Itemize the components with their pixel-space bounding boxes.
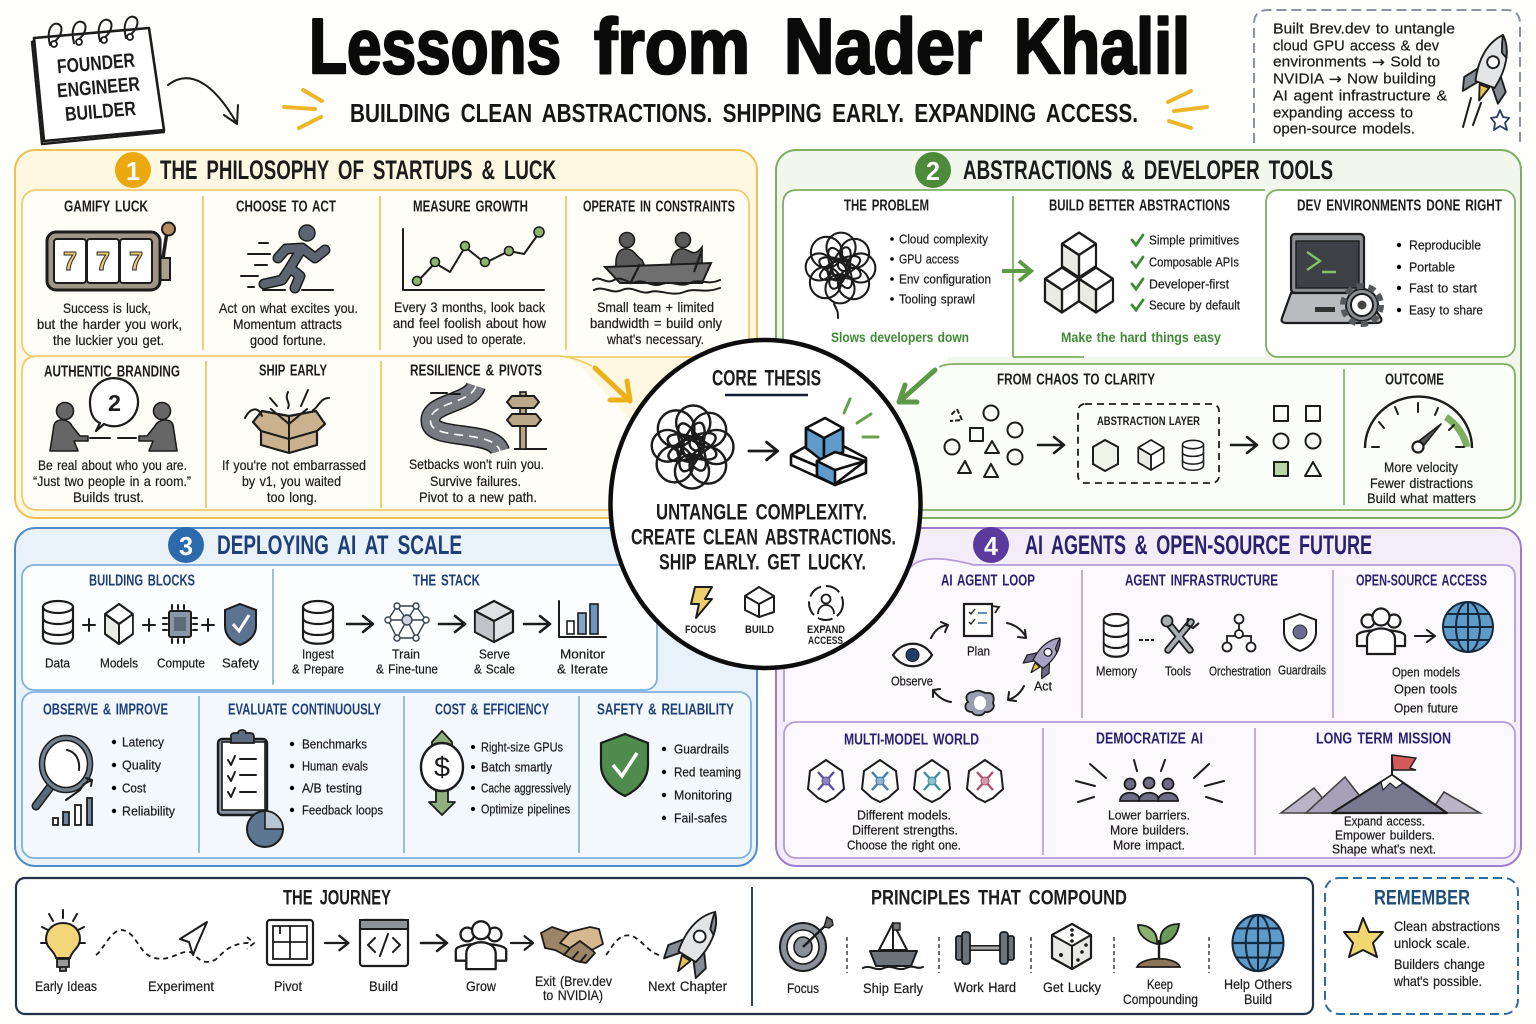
choose to act: Act on what excites you. — [219, 300, 358, 316]
the problem: THE PROBLEM — [844, 198, 929, 214]
evaluate continuously: EVALUATE CONTINUOUSLY — [228, 702, 381, 718]
bio callout: environments → Sold to — [1273, 53, 1440, 71]
the stack: & Iterate — [557, 662, 608, 676]
badge 4: 4 — [984, 531, 999, 561]
the stack: & Fine-tune — [376, 662, 438, 676]
yellow accent right — [1168, 91, 1207, 128]
ship early: SHIP EARLY — [259, 362, 327, 380]
founder notepad — [32, 17, 164, 144]
safety and reliability: Monitoring — [674, 788, 732, 802]
remember text — [1393, 918, 1500, 989]
safety and reliability: Red teaming — [674, 764, 741, 780]
dev environments done right: Reproducible — [1409, 238, 1481, 252]
from chaos to clarity — [944, 372, 1321, 483]
bio callout: Built Brev.dev to untangle — [1273, 20, 1455, 38]
the problem: Tooling sprawl — [899, 292, 975, 306]
dashed path to next chapter — [606, 935, 659, 955]
founder notepad: ENGINEER — [56, 73, 141, 103]
multi-model world — [808, 732, 1003, 852]
building blocks: Data — [45, 656, 71, 670]
step: build: Build — [369, 978, 398, 994]
step: early ideas: Early Ideas — [35, 978, 97, 994]
remember heading: REMEMBER — [1374, 886, 1470, 910]
remember text: unlock scale. — [1394, 935, 1470, 951]
resilience and pivots: RESILIENCE & PIVOTS — [410, 362, 542, 380]
the stack: Ingest — [302, 646, 334, 662]
bottom row card — [22, 356, 640, 510]
the journey heading: THE JOURNEY — [283, 886, 391, 910]
the problem: GPU access — [899, 252, 959, 266]
operate in constraints: bandwidth = build only — [590, 315, 722, 331]
long term mission — [1281, 730, 1480, 856]
from chaos to clarity: FROM CHAOS TO CLARITY — [997, 372, 1155, 388]
expand access icon — [807, 586, 845, 647]
step: experiment — [96, 922, 254, 994]
bio callout: open-source models. — [1273, 120, 1415, 138]
choose to act: Momentum attracts — [233, 316, 342, 332]
step: grow: Grow — [466, 978, 497, 994]
agent infrastructure: Memory — [1096, 664, 1137, 678]
bio callout: NVIDIA → Now building — [1273, 70, 1436, 88]
ai agent loop: Observe — [891, 674, 933, 688]
building blocks: Models — [100, 656, 138, 670]
democratize ai: DEMOCRATIZE AI — [1096, 730, 1203, 748]
core arrow — [749, 442, 778, 460]
principle: help others build — [1224, 915, 1292, 1007]
evaluate continuously: Benchmarks — [302, 736, 367, 752]
principle: keep compounding: Keep — [1147, 976, 1173, 992]
badge 3 — [168, 527, 204, 563]
ship early: too long. — [267, 489, 317, 505]
agent infrastructure: Orchestration — [1209, 664, 1271, 678]
cost and efficiency: Right-size GPUs — [481, 740, 563, 754]
open-source access: Open tools — [1394, 682, 1457, 696]
title: Lessons — [309, 2, 561, 90]
step: exit handshake — [535, 927, 612, 1003]
safety and reliability — [597, 702, 741, 826]
step: next chapter: Next Chapter — [648, 978, 727, 994]
choose to act — [219, 198, 358, 348]
agent infrastructure: AGENT INFRASTRUCTURE — [1125, 572, 1278, 590]
step: pivot — [267, 920, 313, 994]
remember text: what's possible. — [1393, 973, 1482, 989]
star icon — [1344, 918, 1383, 957]
build better abstractions: Make the hard things easy — [1061, 329, 1221, 345]
from chaos to clarity: ABSTRACTION LAYER — [1097, 414, 1200, 428]
outcome gauge: Build what matters — [1367, 490, 1476, 506]
the problem — [806, 198, 991, 345]
the stack: & Scale — [474, 662, 515, 676]
gamify luck: 7 — [63, 246, 77, 276]
evaluate continuously — [218, 702, 383, 847]
badge 2 — [915, 152, 951, 188]
yellow accent left — [284, 90, 322, 128]
dev environments done right: Fast to start — [1409, 280, 1477, 296]
remember callout — [1325, 878, 1518, 1014]
democratize ai: More builders. — [1110, 822, 1189, 838]
the problem: Cloud complexity — [899, 232, 988, 246]
build better abstractions: Developer-first — [1149, 276, 1229, 292]
focus icon — [685, 587, 716, 636]
ai agent loop: Act — [1034, 678, 1052, 694]
long term mission: Empower builders. — [1335, 828, 1435, 842]
building blocks: Compute — [157, 656, 205, 670]
principle: focus: Focus — [787, 980, 819, 996]
build better abstractions: Simple primitives — [1149, 232, 1239, 248]
outcome gauge: Fewer distractions — [1370, 475, 1473, 491]
building blocks: Safety — [222, 656, 259, 670]
observe and improve: OBSERVE & IMPROVE — [43, 702, 168, 718]
core thesis statement: CREATE CLEAN ABSTRACTIONS. — [631, 524, 896, 550]
gamify luck: 7 — [96, 246, 110, 276]
principle: keep compounding — [1123, 924, 1198, 1007]
panel 3: deploying AI at scale — [15, 527, 757, 866]
step: build — [360, 920, 408, 994]
authentic branding: 2 — [108, 390, 121, 416]
title: from — [594, 2, 750, 90]
remember text: Builders change — [1394, 956, 1485, 972]
resilience and pivots: Setbacks won't ruin you. — [409, 456, 544, 472]
ai agent loop: Plan — [967, 644, 990, 658]
building blocks: BUILDING BLOCKS — [89, 572, 195, 590]
cost and efficiency: Optimize pipelines — [481, 802, 570, 816]
badge 4 — [973, 527, 1009, 563]
gamify luck: 7 — [129, 246, 143, 276]
ship early: If you're not embarrassed — [222, 457, 366, 473]
arrow — [511, 936, 533, 950]
build better abstractions — [1045, 198, 1240, 345]
multi-model world: Different strengths. — [852, 822, 958, 838]
step: exit handshake: to NVIDIA) — [543, 987, 603, 1003]
step: grow — [456, 921, 506, 994]
multi-model world: Choose the right one. — [847, 838, 961, 852]
principle: help others build: Build — [1244, 991, 1272, 1007]
safety and reliability: Guardrails — [674, 742, 729, 756]
gamify luck: but the harder you work, — [37, 316, 182, 332]
dev environments done right — [1266, 190, 1515, 357]
bio callout: AI agent infrastructure & — [1273, 88, 1447, 104]
agent infrastructure: Guardrails — [1278, 662, 1326, 678]
founder notepad: FOUNDER — [56, 50, 136, 78]
observe and improve: Latency — [122, 734, 164, 750]
top card — [22, 565, 657, 690]
open-source access — [1356, 572, 1493, 716]
panel 1 heading: THE PHILOSOPHY OF STARTUPS & LUCK — [160, 155, 556, 185]
heading underline — [725, 394, 808, 396]
green arrow between problem and abstractions — [1002, 261, 1031, 281]
subtitle: BUILDING CLEAN ABSTRACTIONS. SHIPPING EARLY. EXPANDING ACCESS. — [350, 98, 1138, 128]
panel 4: AI agents and open-source future — [776, 527, 1521, 866]
long term mission: LONG TERM MISSION — [1316, 730, 1451, 748]
expand access icon: EXPAND — [807, 624, 845, 636]
operate in constraints — [583, 198, 735, 347]
the stack: Train — [392, 646, 420, 662]
authentic branding — [33, 364, 191, 505]
the stack: THE STACK — [413, 572, 481, 590]
bio callout — [1254, 10, 1524, 143]
expand access icon: ACCESS — [808, 635, 843, 647]
the problem: Env configuration — [899, 272, 991, 286]
authentic branding: Builds trust. — [73, 489, 144, 505]
badge 1: 1 — [126, 156, 140, 186]
democratize ai: More impact. — [1113, 838, 1185, 852]
open-source access: Open future — [1394, 700, 1458, 716]
founder notepad: BUILDER — [64, 98, 137, 126]
top row card — [22, 190, 749, 357]
open-source access: Open models — [1392, 664, 1460, 680]
top card — [784, 559, 1515, 722]
operate in constraints: what's necessary. — [606, 331, 704, 347]
multi-model world: Different models. — [857, 808, 951, 822]
ai agent loop — [891, 572, 1071, 715]
problem and abstractions card — [783, 190, 1265, 400]
measure growth: and feel foolish about how — [393, 315, 547, 331]
authentic branding: Be real about who you are. — [38, 457, 187, 473]
principle: ship early: Ship Early — [863, 980, 923, 996]
observe and improve: Quality — [122, 758, 161, 772]
democratize ai — [1076, 730, 1224, 852]
authentic branding: AUTHENTIC BRANDING — [44, 364, 180, 380]
principles heading: PRINCIPLES THAT COMPOUND — [871, 886, 1127, 910]
evaluate continuously: Feedback loops — [302, 802, 383, 818]
agent infrastructure — [1096, 572, 1326, 678]
build better abstractions: Secure by default — [1149, 298, 1240, 312]
core thesis heading: CORE THESIS — [712, 366, 821, 390]
observe and improve: Cost — [122, 780, 146, 796]
outcome gauge: More velocity — [1384, 459, 1458, 475]
bottom panel: journey and principles — [16, 878, 1313, 1014]
remember text: Clean abstractions — [1394, 918, 1500, 934]
multi-model world: MULTI-MODEL WORLD — [844, 732, 979, 748]
core thesis statement — [631, 500, 896, 574]
arrow from notepad — [168, 78, 238, 124]
cost and efficiency: $ — [434, 752, 450, 782]
core thesis circle — [610, 340, 920, 668]
gamify luck: Success is luck, — [63, 300, 151, 316]
cost and efficiency — [421, 702, 571, 816]
build icon — [745, 587, 774, 636]
cost and efficiency: Batch smartly — [481, 760, 552, 774]
the stack — [292, 572, 608, 676]
badge 1 — [115, 152, 151, 188]
step: next chapter — [648, 900, 734, 994]
democratize ai: Lower barriers. — [1108, 808, 1190, 822]
focus icon: FOCUS — [685, 624, 716, 636]
the stack: & Prepare — [292, 662, 344, 676]
principle: get lucky — [1043, 924, 1101, 995]
chaos to clarity card — [860, 364, 1515, 510]
principle: keep compounding: Compounding — [1123, 991, 1198, 1007]
bio callout: cloud GPU access & dev — [1273, 38, 1439, 54]
yellow arrow to core thesis — [595, 368, 630, 401]
step: early ideas — [35, 910, 97, 994]
badge 3: 3 — [179, 531, 193, 561]
panel 2 heading: ABSTRACTIONS & DEVELOPER TOOLS — [963, 155, 1333, 185]
build better abstractions: BUILD BETTER ABSTRACTIONS — [1049, 198, 1230, 214]
principle: work hard: Work Hard — [954, 979, 1016, 995]
observe and improve: Reliability — [122, 804, 175, 818]
gamify luck — [37, 198, 182, 348]
title: Nader — [784, 2, 982, 90]
bio callout: expanding access to — [1273, 104, 1413, 122]
ship early: by v1, you waited — [242, 473, 341, 489]
principle: get lucky: Get Lucky — [1043, 979, 1101, 995]
principle: help others build: Help Others — [1224, 976, 1292, 992]
principle: focus — [780, 917, 833, 996]
building blocks — [43, 572, 259, 670]
resilience and pivots: Survive failures. — [430, 473, 521, 489]
core thesis statement: SHIP EARLY. GET LUCKY. — [659, 550, 866, 574]
evaluate continuously: A/B testing — [302, 780, 362, 796]
journey steps — [35, 900, 734, 1003]
measure growth: MEASURE GROWTH — [413, 198, 528, 216]
arrow — [325, 936, 348, 950]
outcome gauge: OUTCOME — [1385, 372, 1444, 388]
principle: work hard — [954, 932, 1016, 995]
principle: ship early — [863, 923, 923, 996]
title: Khalil — [1014, 2, 1190, 90]
resilience and pivots: Pivot to a new path. — [419, 489, 537, 505]
green arrow to core thesis — [899, 370, 935, 402]
build icon: BUILD — [745, 624, 774, 636]
observe and improve — [36, 702, 175, 825]
principles icons — [780, 915, 1292, 1007]
clean cubes icon — [791, 418, 866, 485]
the stack: Monitor — [560, 646, 606, 662]
arrow — [421, 935, 447, 951]
outcome gauge — [1365, 372, 1476, 506]
green sparks — [844, 399, 878, 437]
measure growth: Every 3 months, look back — [394, 299, 546, 315]
panel 3 heading: DEPLOYING AI AT SCALE — [217, 530, 462, 560]
panel 1: philosophy of startups and luck — [15, 150, 757, 518]
evaluate continuously: Human evals — [302, 758, 368, 774]
choose to act: good fortune. — [250, 332, 326, 348]
core thesis statement: UNTANGLE COMPLEXITY. — [656, 500, 867, 524]
bottom card — [22, 692, 751, 858]
step: experiment: Experiment — [148, 978, 214, 994]
badge 2: 2 — [926, 156, 940, 186]
resilience and pivots — [409, 362, 547, 505]
the problem: Slows developers down — [831, 329, 969, 345]
ship early — [222, 362, 366, 505]
the stack: Serve — [479, 646, 510, 662]
build better abstractions: Composable APIs — [1149, 254, 1239, 270]
measure growth: you used to operate. — [413, 331, 526, 347]
choose to act: CHOOSE TO ACT — [236, 198, 336, 216]
step: exit handshake: Exit (Brev.dev — [535, 973, 612, 989]
cost and efficiency: Cache aggressively — [481, 780, 571, 796]
agent infrastructure: Tools — [1165, 664, 1191, 678]
long term mission: Expand access. — [1344, 814, 1425, 828]
title — [309, 2, 1190, 90]
operate in constraints: Small team + limited — [597, 299, 714, 315]
safety and reliability: SAFETY & RELIABILITY — [597, 702, 735, 718]
authentic branding: “Just two people in a room.” — [33, 473, 191, 489]
measure growth — [393, 198, 547, 347]
gamify luck: the luckier you get. — [53, 332, 164, 348]
ai agent loop: AI AGENT LOOP — [941, 572, 1035, 590]
bottom card — [784, 722, 1515, 858]
dev environments done right: Easy to share — [1409, 302, 1483, 318]
long term mission: Shape what's next. — [1332, 842, 1436, 856]
operate in constraints: OPERATE IN CONSTRAINTS — [583, 198, 735, 216]
panel 2: abstractions and developer tools — [776, 150, 1521, 518]
gamify luck: GAMIFY LUCK — [64, 198, 149, 216]
tangle icon — [652, 406, 733, 488]
dev environments done right: Portable — [1409, 260, 1455, 274]
step: pivot: Pivot — [274, 978, 302, 994]
panel 4 heading: AI AGENTS & OPEN-SOURCE FUTURE — [1025, 530, 1372, 560]
safety and reliability: Fail-safes — [674, 810, 727, 826]
cost and efficiency: COST & EFFICIENCY — [435, 702, 549, 718]
